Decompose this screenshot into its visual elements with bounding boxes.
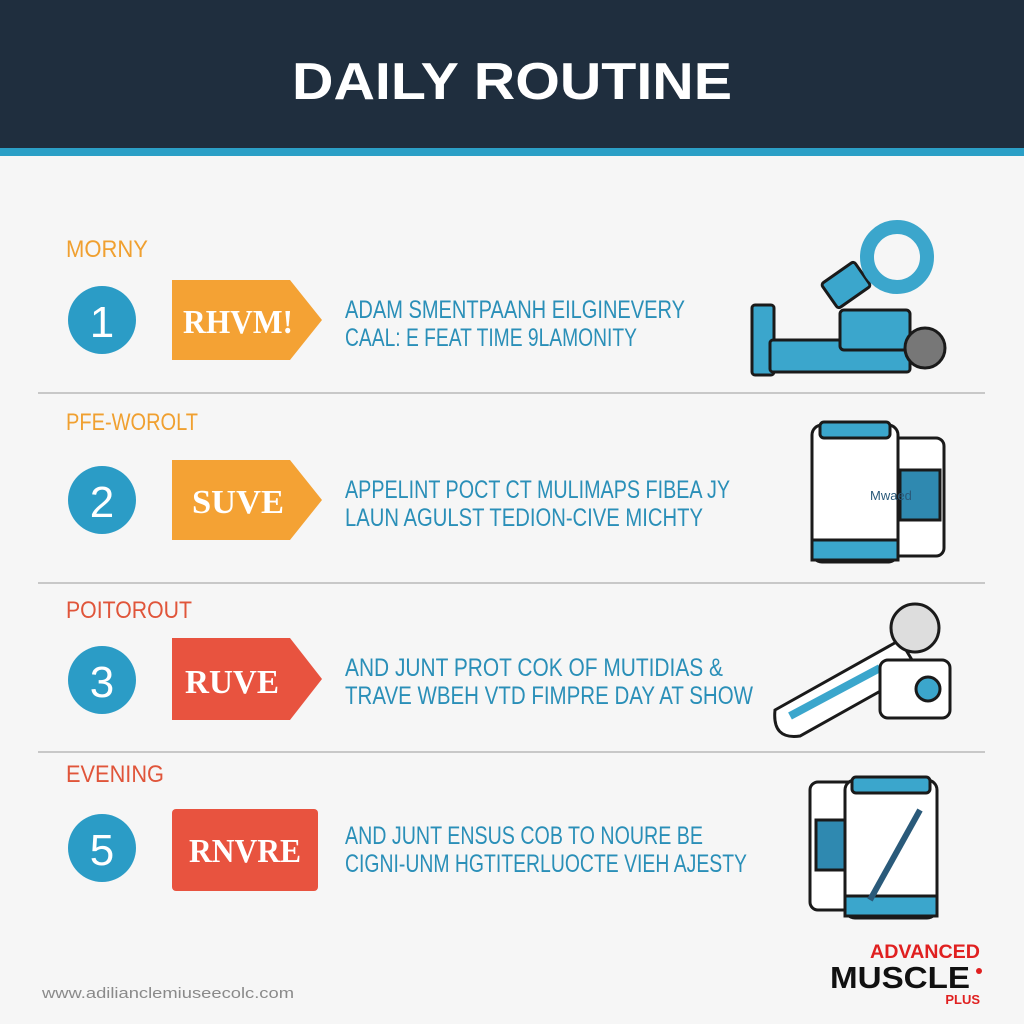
icon: supplement bottles bbox=[812, 422, 944, 562]
row 4: evening: AND JUNT ENSUS COB TO NOURE BE bbox=[345, 822, 703, 850]
row 2: pre-workout: 2 bbox=[90, 478, 114, 527]
icon: supplement bottles: Mwaed bbox=[870, 488, 912, 503]
logo: PLUS bbox=[945, 992, 980, 1007]
row 4: evening: CIGNI-UNM HGTITERLUOCTE VIEH AJESTY bbox=[345, 850, 747, 878]
row 2: pre-workout: LAUN AGULST TEDION-CIVE MICHTY bbox=[345, 504, 703, 532]
row 1: morning: ADAM SMENTPAANH EILGINEVERY bbox=[345, 296, 685, 324]
row 3: post-workout: RUVE bbox=[185, 664, 279, 701]
row 2: pre-workout: PFE-WOROLT bbox=[66, 409, 198, 436]
logo: MUSCLE bbox=[830, 960, 970, 995]
row 1: morning bbox=[66, 236, 685, 360]
title: DAILY ROUTINE bbox=[292, 53, 732, 111]
row 4: evening bbox=[66, 761, 747, 891]
row 2: pre-workout: APPELINT POCT CT MULIMAPS FIBEA JY bbox=[345, 476, 730, 504]
logo: ADVANCED bbox=[870, 942, 980, 963]
row 1: morning: MORNY bbox=[66, 236, 148, 263]
icon: supplement bottles evening bbox=[810, 777, 937, 918]
header banner bbox=[0, 0, 1024, 156]
icon: shaker and equipment bbox=[775, 604, 950, 736]
row 1: morning: RHVM! bbox=[183, 304, 293, 341]
row 2: pre-workout: SUVE bbox=[192, 484, 284, 521]
row 4: evening: RNVRE bbox=[189, 833, 301, 870]
row 3: post-workout bbox=[66, 597, 753, 720]
row 4: evening: EVENING bbox=[66, 761, 164, 788]
row 3: post-workout: POITOROUT bbox=[66, 597, 192, 624]
icon: exercise machine bbox=[752, 227, 945, 375]
row 1: morning: 1 bbox=[90, 298, 114, 347]
row 3: post-workout: TRAVE WBEH VTD FIMPRE DAY AT SHOW bbox=[345, 682, 753, 710]
logo bbox=[830, 942, 982, 1007]
row 1: morning: CAAL: E FEAT TIME 9LAMONITY bbox=[345, 324, 637, 352]
row 3: post-workout: AND JUNT PROT COK OF MUTIDIAS & bbox=[345, 654, 723, 682]
footer url: www.adilianclemiuseecolc.com bbox=[41, 985, 294, 1002]
row 3: post-workout: 3 bbox=[90, 658, 114, 707]
row 2: pre-workout bbox=[66, 409, 730, 540]
row 4: evening: 5 bbox=[90, 826, 114, 875]
